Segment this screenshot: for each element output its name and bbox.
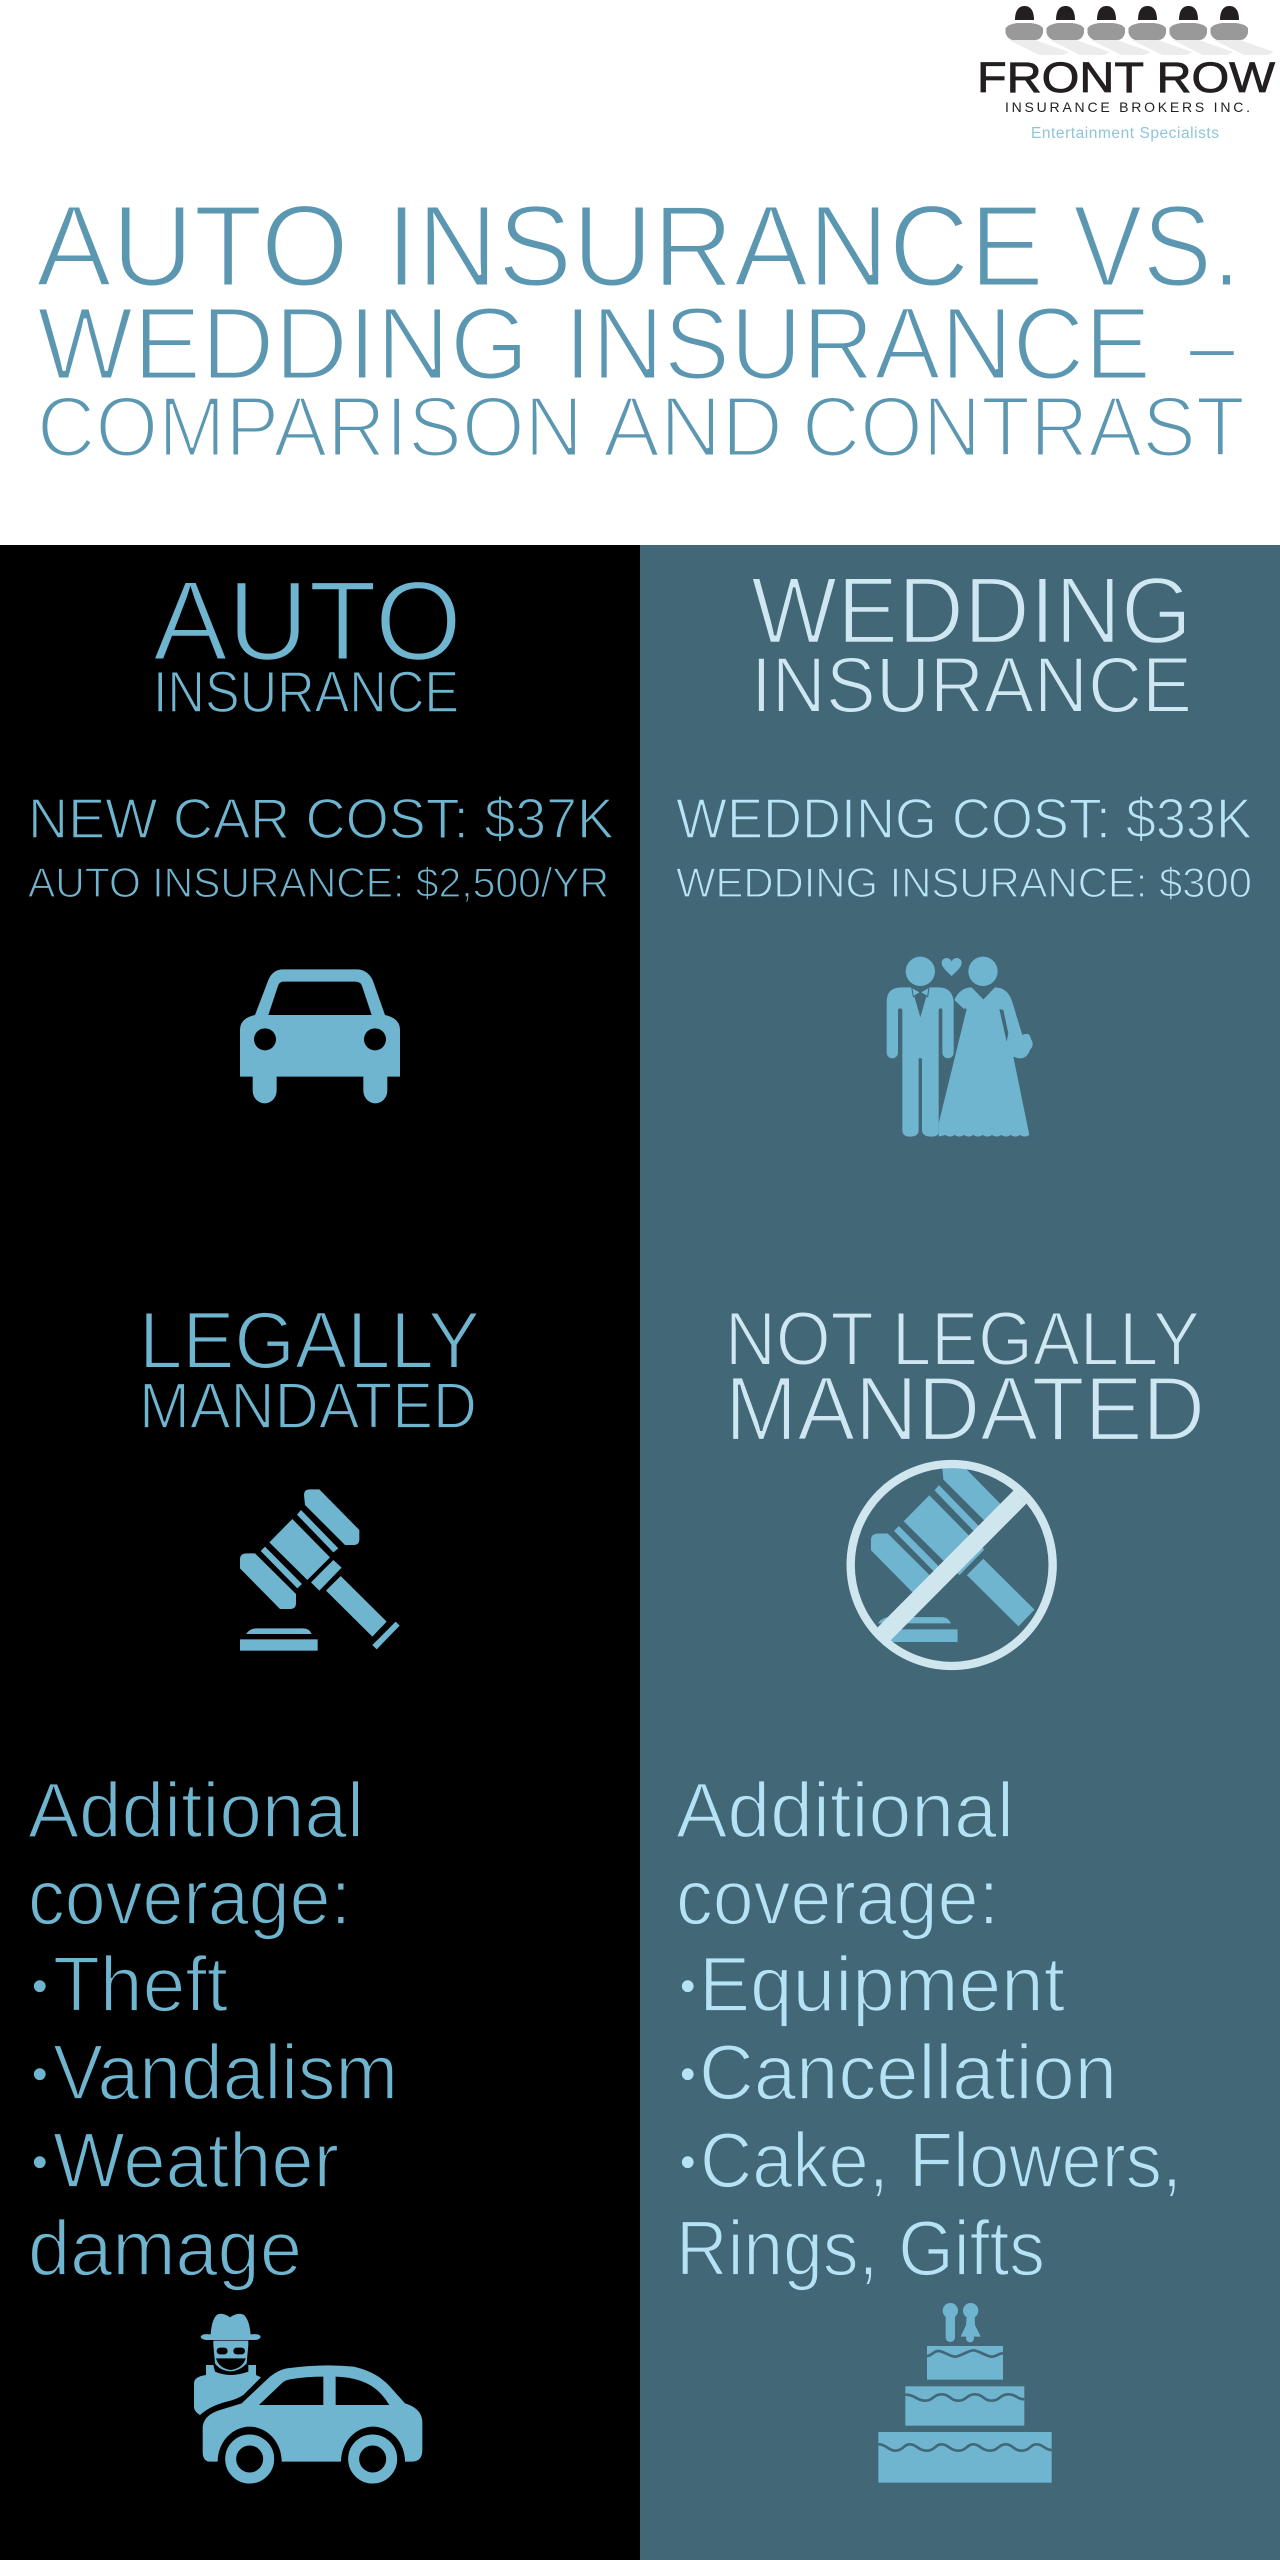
auto additional coverage list: damage — [28, 2204, 302, 2292]
auto additional coverage list: • — [31, 2134, 49, 2190]
logo audience heads — [1015, 6, 1239, 20]
title: AUTO — [36, 181, 349, 311]
auto cost figures: NEW CAR COST: $37K — [28, 787, 614, 851]
wedding additional coverage list: • — [679, 1958, 697, 2014]
logo audience shoulders — [1006, 23, 1248, 40]
wedding additional coverage list: coverage: — [676, 1853, 999, 1941]
logo seat shadows — [1009, 40, 1274, 55]
icon: car front — [240, 969, 400, 1103]
logo wordmark: FRONT ROW — [977, 54, 1275, 102]
legally mandated heading — [139, 1296, 480, 1442]
wedding cost figures: WEDDING INSURANCE: $300 — [676, 859, 1252, 906]
wedding additional coverage list: Cancellation — [699, 2028, 1117, 2116]
icon: wedding cake — [878, 2303, 1052, 2483]
title: COMPARISON — [37, 380, 583, 475]
auto heading: AUTO — [153, 558, 462, 684]
not legally mandated heading — [725, 1297, 1205, 1460]
title: – — [1189, 286, 1236, 401]
logo: Front Row Insurance Brokers — [977, 6, 1275, 142]
legally mandated heading: LEGALLY — [139, 1296, 480, 1386]
auto cost figures — [28, 787, 614, 906]
wedding additional coverage list: Rings, Gifts — [676, 2204, 1045, 2292]
auto additional coverage list: Theft — [53, 1940, 228, 2028]
icon: gavel — [240, 1489, 400, 1651]
title: INSURANCE — [564, 286, 1151, 401]
title: WEDDING — [37, 286, 529, 401]
icon: thief and car — [194, 2314, 422, 2478]
wedding heading — [751, 558, 1192, 729]
icon: bride and groom — [887, 957, 1033, 1137]
auto additional coverage list — [28, 1766, 398, 2292]
auto additional coverage list: • — [31, 2046, 49, 2102]
auto additional coverage list: Additional — [28, 1766, 364, 1854]
auto additional coverage list: coverage: — [28, 1853, 351, 1941]
not legally mandated heading: MANDATED — [725, 1359, 1205, 1460]
wedding additional coverage list: • — [679, 2046, 697, 2102]
wedding cost figures: WEDDING COST: $33K — [676, 787, 1252, 851]
auto additional coverage list: Vandalism — [53, 2028, 398, 2116]
wedding additional coverage list: Equipment — [699, 1940, 1065, 2028]
wedding additional coverage list: • — [679, 2134, 697, 2190]
title — [36, 181, 1245, 475]
not legally mandated heading: NOT LEGALLY — [725, 1297, 1200, 1382]
auto additional coverage list: • — [31, 1958, 49, 2014]
auto heading: INSURANCE — [153, 660, 459, 725]
title: AND — [603, 380, 783, 475]
auto additional coverage list: Weather — [53, 2116, 339, 2204]
panel: auto insurance — [0, 545, 640, 2560]
logo tagline: Entertainment Specialists — [1031, 125, 1219, 142]
wedding cost figures — [676, 787, 1252, 906]
title: VS. — [1073, 181, 1241, 311]
title: INSURANCE — [386, 181, 1044, 311]
panel: wedding insurance — [640, 545, 1280, 2560]
wedding additional coverage list — [676, 1766, 1182, 2292]
wedding additional coverage list: Additional — [676, 1766, 1014, 1854]
icon: prohibited gavel — [851, 1462, 1053, 1666]
legally mandated heading: MANDATED — [139, 1369, 477, 1442]
title: CONTRAST — [802, 380, 1245, 475]
logo subtitle: INSURANCE BROKERS INC. — [1005, 99, 1250, 115]
wedding additional coverage list: Cake, Flowers, — [700, 2116, 1182, 2204]
wedding heading: INSURANCE — [751, 640, 1192, 729]
wedding heading: WEDDING — [751, 558, 1192, 664]
auto cost figures: AUTO INSURANCE: $2,500/YR — [28, 859, 609, 906]
